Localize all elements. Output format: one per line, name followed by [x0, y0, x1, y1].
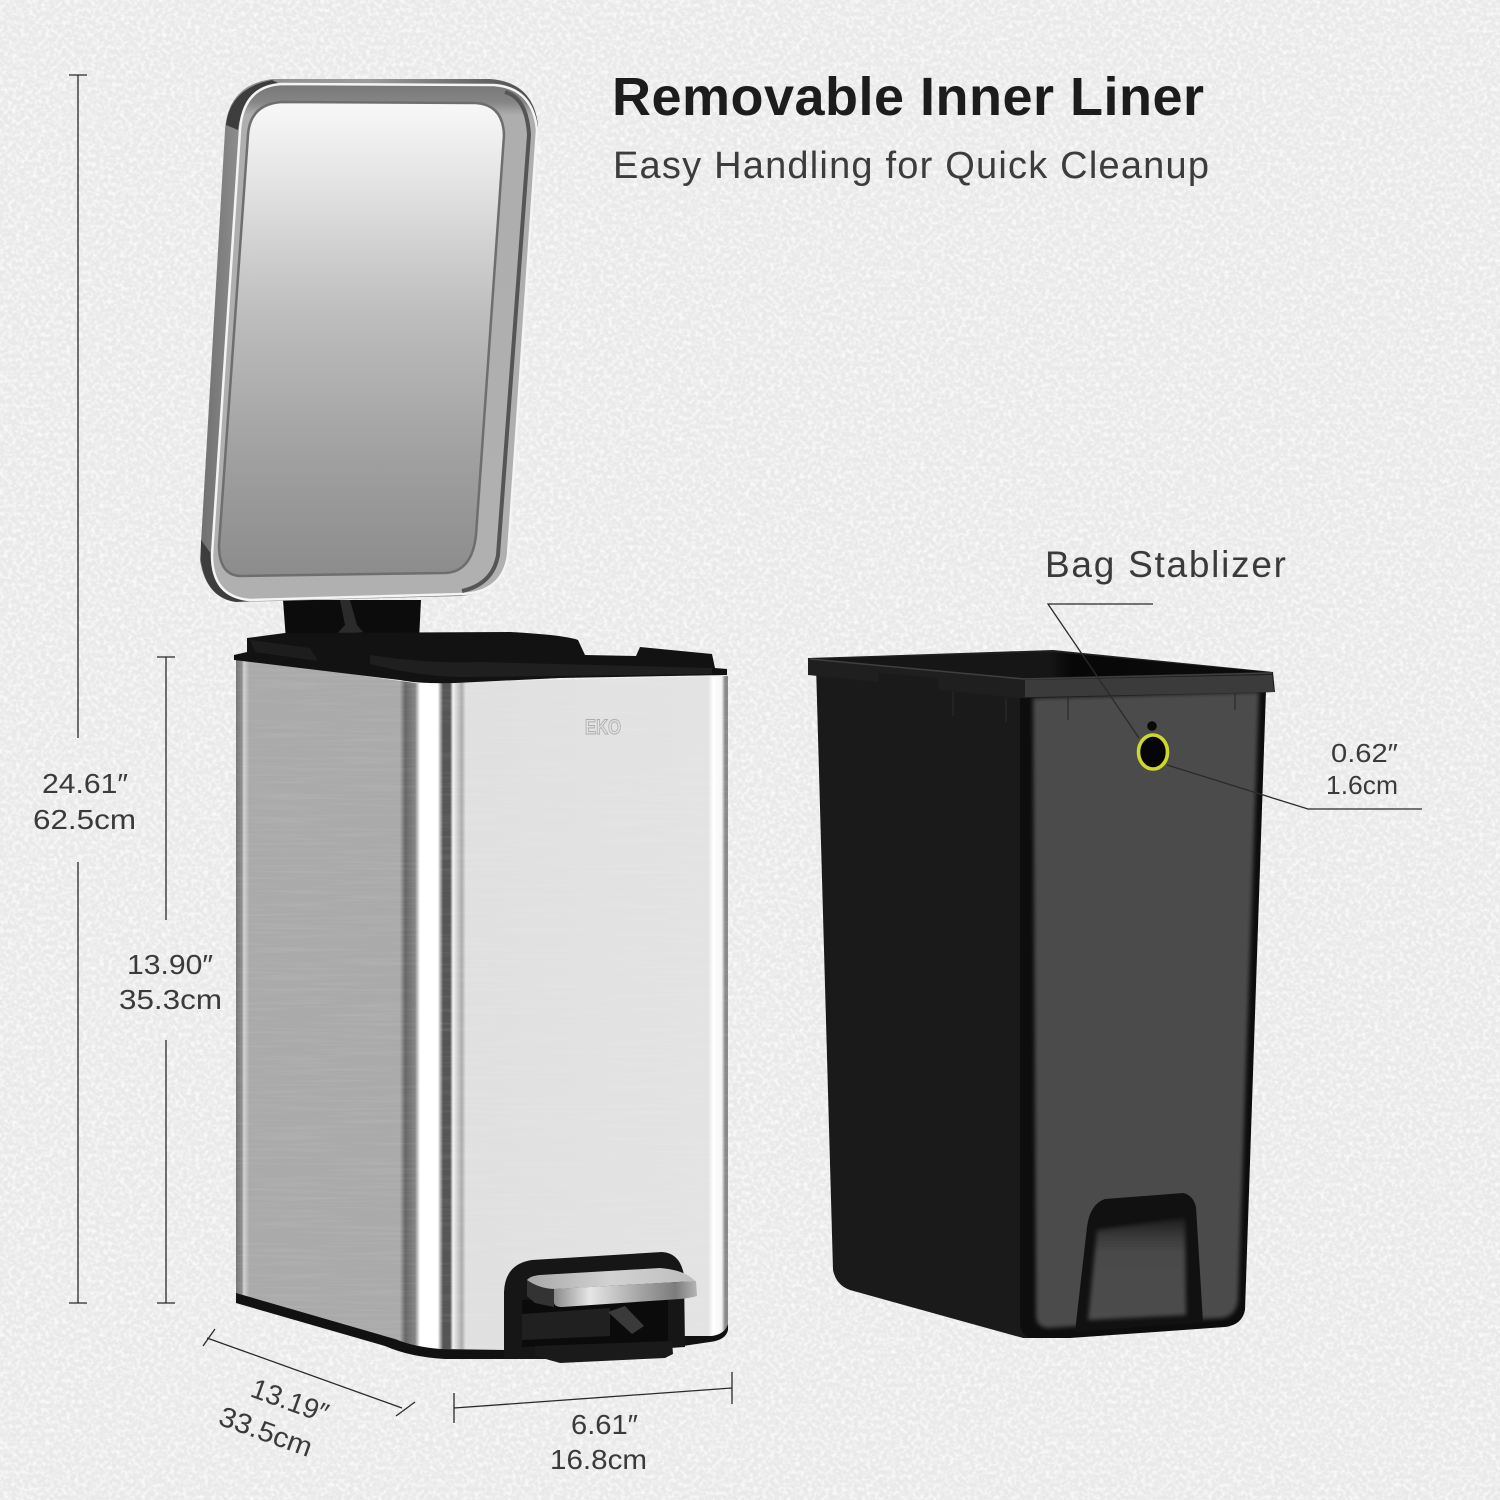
callout: hole diameter 0.62 in [1167, 738, 1422, 809]
dimension: width 6.61 in: 6.61″ [571, 1409, 638, 1440]
pedal recess frame [504, 1252, 685, 1359]
dimension: total height 24.61 in [33, 75, 136, 1303]
lid rim shadow line [462, 92, 529, 591]
liner rim left [808, 650, 1275, 698]
pedal assembly [504, 1252, 697, 1363]
black bottom strip right [683, 1324, 728, 1346]
metal panels [236, 650, 728, 1360]
title: Removable Inner Liner [612, 67, 1204, 127]
dimension: width 6.61 in: 16.8cm [550, 1444, 647, 1475]
rim inner tab [250, 640, 318, 661]
liner rim top highlight [810, 659, 1272, 679]
pedal side [527, 1280, 554, 1307]
black inner liner [808, 650, 1275, 1338]
lid back edge [200, 79, 538, 602]
pedal linkage [608, 1306, 644, 1334]
lid glass panel [219, 102, 504, 576]
liner left face [816, 665, 1033, 1338]
black top rim [234, 632, 727, 683]
callout: hole diameter 0.62 in: 0.62″ [1331, 738, 1398, 768]
foot plate [535, 1341, 673, 1363]
dimension: body height 13.90 in: 13.90″ [127, 949, 213, 980]
EKO logo: EKO [585, 716, 621, 739]
pedal opening [522, 1296, 668, 1347]
lid dark edge at corners [201, 80, 280, 602]
stainless steel bin body [234, 632, 728, 1363]
stabilizer slot [1147, 721, 1157, 731]
dimension: width 6.61 in [454, 1372, 732, 1475]
bag stabilizer hole highlight [1138, 735, 1168, 769]
dimension: body height 13.90 in [119, 657, 222, 1303]
pedal mechanism [522, 1308, 610, 1340]
black bottom strip [236, 1293, 505, 1359]
liner rim right front [1025, 675, 1274, 697]
liner right face lit panel [1033, 692, 1259, 1328]
dimension: depth 13.19 in: 13.19″ [247, 1373, 333, 1429]
dimension: depth 13.19 in [203, 1329, 415, 1463]
pedal top face [527, 1268, 695, 1289]
liner rib ticks [953, 692, 1235, 722]
subtitle: Easy Handling for Quick Cleanup [613, 145, 1209, 187]
liner right face [1020, 690, 1266, 1338]
callout: hole diameter 0.62 in: 1.6cm [1326, 770, 1398, 800]
open lid [200, 79, 538, 640]
dimension: body height 13.90 in: 35.3cm [119, 984, 222, 1015]
dimension: depth 13.19 in: 33.5cm [215, 1401, 317, 1463]
lid front rim [212, 84, 537, 600]
liner handle notch [1075, 1193, 1203, 1332]
rim inner edge [370, 655, 712, 677]
lid hinge [283, 600, 421, 640]
pedal front face [554, 1281, 697, 1307]
dimension: total height 24.61 in: 24.61″ [42, 768, 128, 799]
liner opening [812, 652, 1268, 678]
dimension: total height 24.61 in: 62.5cm [33, 804, 136, 835]
callout: bag stabilizer [1045, 544, 1286, 738]
callout: bag stabilizer: Bag Stablizer [1045, 544, 1286, 585]
